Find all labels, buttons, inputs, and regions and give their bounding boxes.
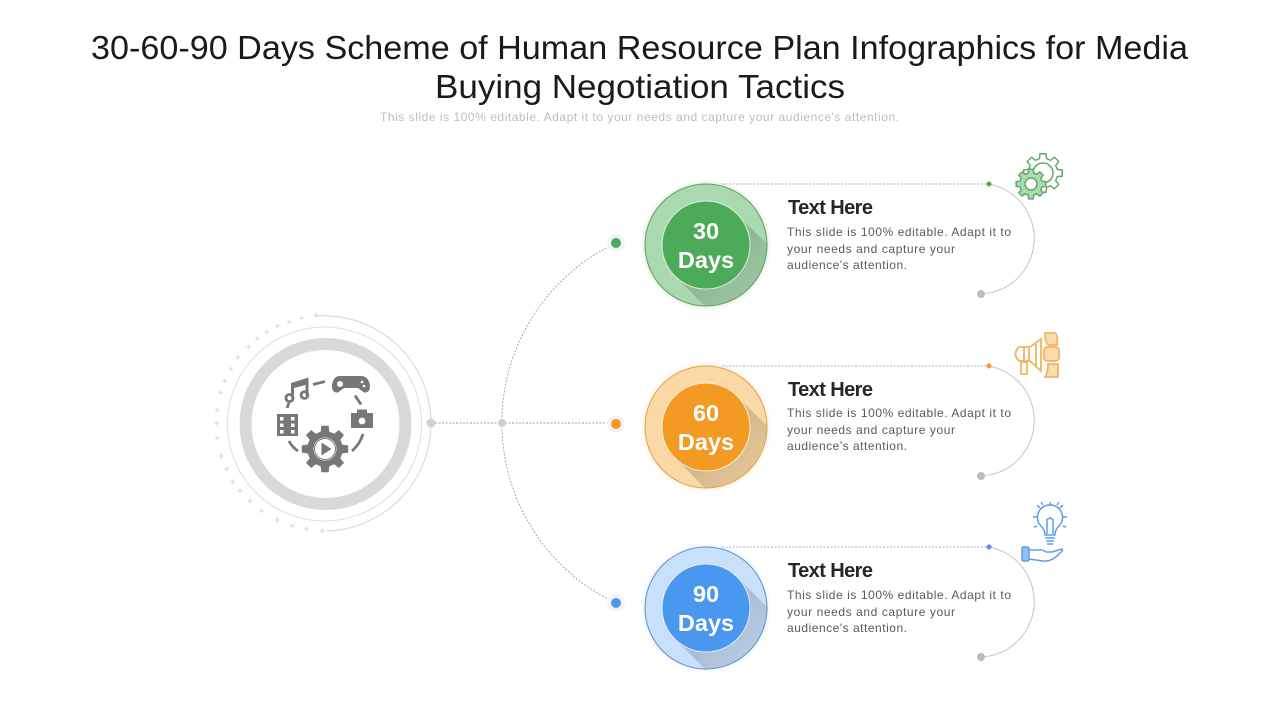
icon: film strip	[277, 414, 298, 436]
subtitle: This slide is 100% editable. Adapt it to your needs and capture your audience's attention.	[380, 110, 899, 124]
icon: dashed cycle arcs	[287, 382, 363, 451]
body text	[787, 225, 1011, 272]
heading: Text Here	[788, 379, 873, 401]
body text: audience's attention.	[787, 258, 907, 272]
icon: music note	[286, 378, 308, 402]
icon: megaphone with bubbles	[1016, 333, 1059, 377]
heading: Text Here	[788, 197, 873, 219]
connector dots	[426, 234, 625, 612]
body text: your needs and capture your	[787, 605, 955, 619]
panel: 60 days	[642, 332, 1060, 491]
body text	[787, 588, 1011, 635]
title	[91, 29, 1189, 105]
icon: light bulb over hand	[1022, 502, 1067, 561]
icon: gears	[1016, 154, 1062, 199]
body text: your needs and capture your	[787, 423, 955, 437]
badge: 60 days: Days	[678, 429, 734, 455]
body text: audience's attention.	[787, 439, 907, 453]
icon: game controller	[332, 376, 370, 393]
badge: 60 days	[642, 363, 770, 491]
connector arc	[722, 364, 1034, 480]
panel: 90 days	[642, 502, 1067, 672]
central hub	[214, 313, 431, 533]
panel: 30 days	[642, 153, 1063, 309]
connector arc	[722, 544, 1034, 661]
badge: 60 days: 60	[693, 400, 719, 426]
badge: 30 days: 30	[693, 218, 719, 244]
body text	[787, 406, 1011, 453]
badge: 90 days: 90	[693, 581, 719, 607]
badge: 90 days	[642, 544, 770, 672]
title: 30-60-90 Days Scheme of Human Resource Plan Infographics for Media	[91, 29, 1189, 66]
body text: This slide is 100% editable. Adapt it to	[787, 588, 1011, 602]
connector: trunk and branches	[435, 243, 616, 603]
icon: camera	[351, 410, 373, 428]
body text: audience's attention.	[787, 621, 907, 635]
body text: This slide is 100% editable. Adapt it to	[787, 225, 1011, 239]
body text: your needs and capture your	[787, 242, 955, 256]
title: Buying Negotiation Tactics	[435, 68, 845, 105]
icon: play gear	[302, 426, 348, 472]
badge: 30 days	[642, 181, 770, 309]
icon: media cycle	[277, 376, 373, 472]
hub rings	[214, 313, 431, 533]
badge: 90 days: Days	[678, 610, 734, 636]
heading: Text Here	[788, 560, 873, 582]
badge: 30 days: Days	[678, 247, 734, 273]
connector arc	[722, 182, 1034, 298]
body text: This slide is 100% editable. Adapt it to	[787, 406, 1011, 420]
